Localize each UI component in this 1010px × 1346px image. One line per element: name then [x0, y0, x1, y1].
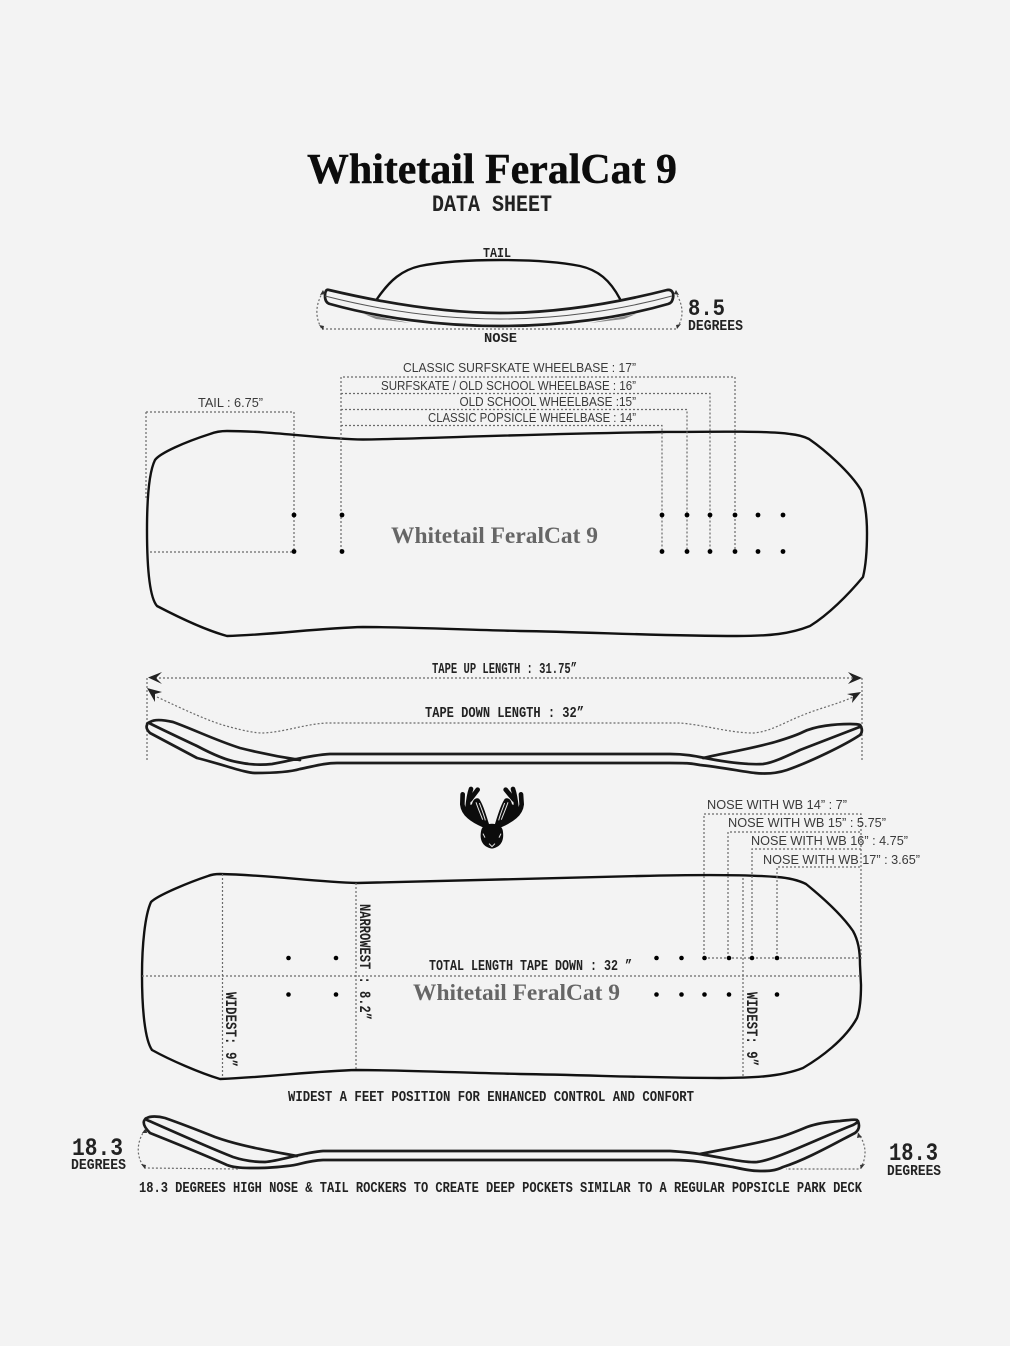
- label: tail length: TAIL : 6.75”: [198, 395, 263, 410]
- arrowheads: [147, 672, 862, 703]
- antler mass and ears: [463, 798, 521, 827]
- second side view with rocker angles: [71, 1116, 941, 1180]
- board outline: [147, 431, 867, 636]
- label: narrowest: NARROWEST : 8.2”: [355, 904, 373, 1020]
- concave shadow wedges: [364, 314, 636, 323]
- tail arch outline: [377, 260, 620, 299]
- label: wheelbase 14: CLASSIC POPSICLE WHEELBASE : 14”: [428, 410, 636, 425]
- side view with tape lengths: [147, 661, 862, 774]
- side profile outline: [144, 1116, 859, 1171]
- label: nose wb 15: NOSE WITH WB 15” : 5.75”: [728, 815, 886, 830]
- caption: widest feet position: WIDEST A FEET POSITION FOR ENHANCED CONTROL AND CONFORT: [288, 1089, 694, 1106]
- label: tail: TAIL: [483, 246, 511, 262]
- label: wheelbase 16: SURFSKATE / OLD SCHOOL WHEELBASE : 16”: [381, 378, 636, 393]
- label: wheelbase 17: CLASSIC SURFSKATE WHEELBASE : 17”: [403, 360, 636, 375]
- concave deck profile: [325, 290, 673, 326]
- label: left degrees: DEGREES: [71, 1158, 126, 1174]
- value: 8.5 degrees: 8.5: [688, 296, 725, 322]
- end view concave diagram: [317, 246, 743, 347]
- label: degrees: DEGREES: [688, 319, 743, 335]
- icon: antlered jackalope logo: [462, 789, 522, 849]
- label: widest right: WIDEST: 9”: [742, 992, 760, 1066]
- angle arrow tips: [319, 290, 681, 330]
- truck mounting holes: [292, 513, 785, 554]
- rocker arrow tips: [141, 1128, 865, 1169]
- ear inner highlights: [476, 802, 508, 820]
- left rocker angle: [138, 1130, 240, 1169]
- label: nose wb 16: NOSE WITH WB 16” : 4.75”: [751, 833, 908, 848]
- label: nose: NOSE: [484, 331, 517, 347]
- value: left 18.3: 18.3: [72, 1134, 123, 1163]
- label: total length: TOTAL LENGTH TAPE DOWN : 32 ”: [429, 958, 632, 975]
- concave centre line: [325, 296, 672, 319]
- board name: Whitetail FeralCat 9: [413, 980, 620, 1005]
- tape down dimension curve: [157, 697, 853, 733]
- tail dimension: [146, 412, 294, 552]
- board outline: [142, 874, 861, 1079]
- subtitle: data sheet: DATA SHEET: [432, 192, 552, 218]
- title: Whitetail FeralCat 9: [307, 147, 677, 193]
- label: tape up length: TAPE UP LENGTH : 31.75”: [432, 661, 577, 678]
- label: nose wb 17: NOSE WITH WB 17” : 3.65”: [763, 852, 920, 867]
- value: right 18.3: 18.3: [889, 1139, 938, 1168]
- second top view board with shape dimensions: [142, 797, 920, 1079]
- tape up dimension line: [147, 678, 862, 762]
- concave angle dimension: [317, 292, 682, 329]
- wheelbase dimensions: [341, 377, 735, 551]
- antlers: [462, 789, 522, 825]
- label: widest left: WIDEST: 9”: [221, 992, 239, 1067]
- label: wheelbase 15: OLD SCHOOL WHEELBASE :15”: [460, 394, 636, 409]
- truck mounting holes: [286, 956, 779, 997]
- right rocker angle: [786, 1133, 865, 1169]
- side profile outline: [147, 720, 862, 774]
- label: right degrees: DEGREES: [887, 1164, 941, 1180]
- label: nose wb 14: NOSE WITH WB 14” : 7”: [707, 797, 847, 812]
- nose dimension lines: [704, 814, 861, 960]
- shape dimension lines: [142, 874, 861, 1078]
- head: [481, 824, 503, 849]
- top view board with wheelbase dimensions: [146, 360, 867, 636]
- face details: [483, 834, 501, 847]
- board name: Whitetail FeralCat 9: [391, 523, 598, 548]
- label: tape down length: TAPE DOWN LENGTH : 32”: [425, 705, 584, 722]
